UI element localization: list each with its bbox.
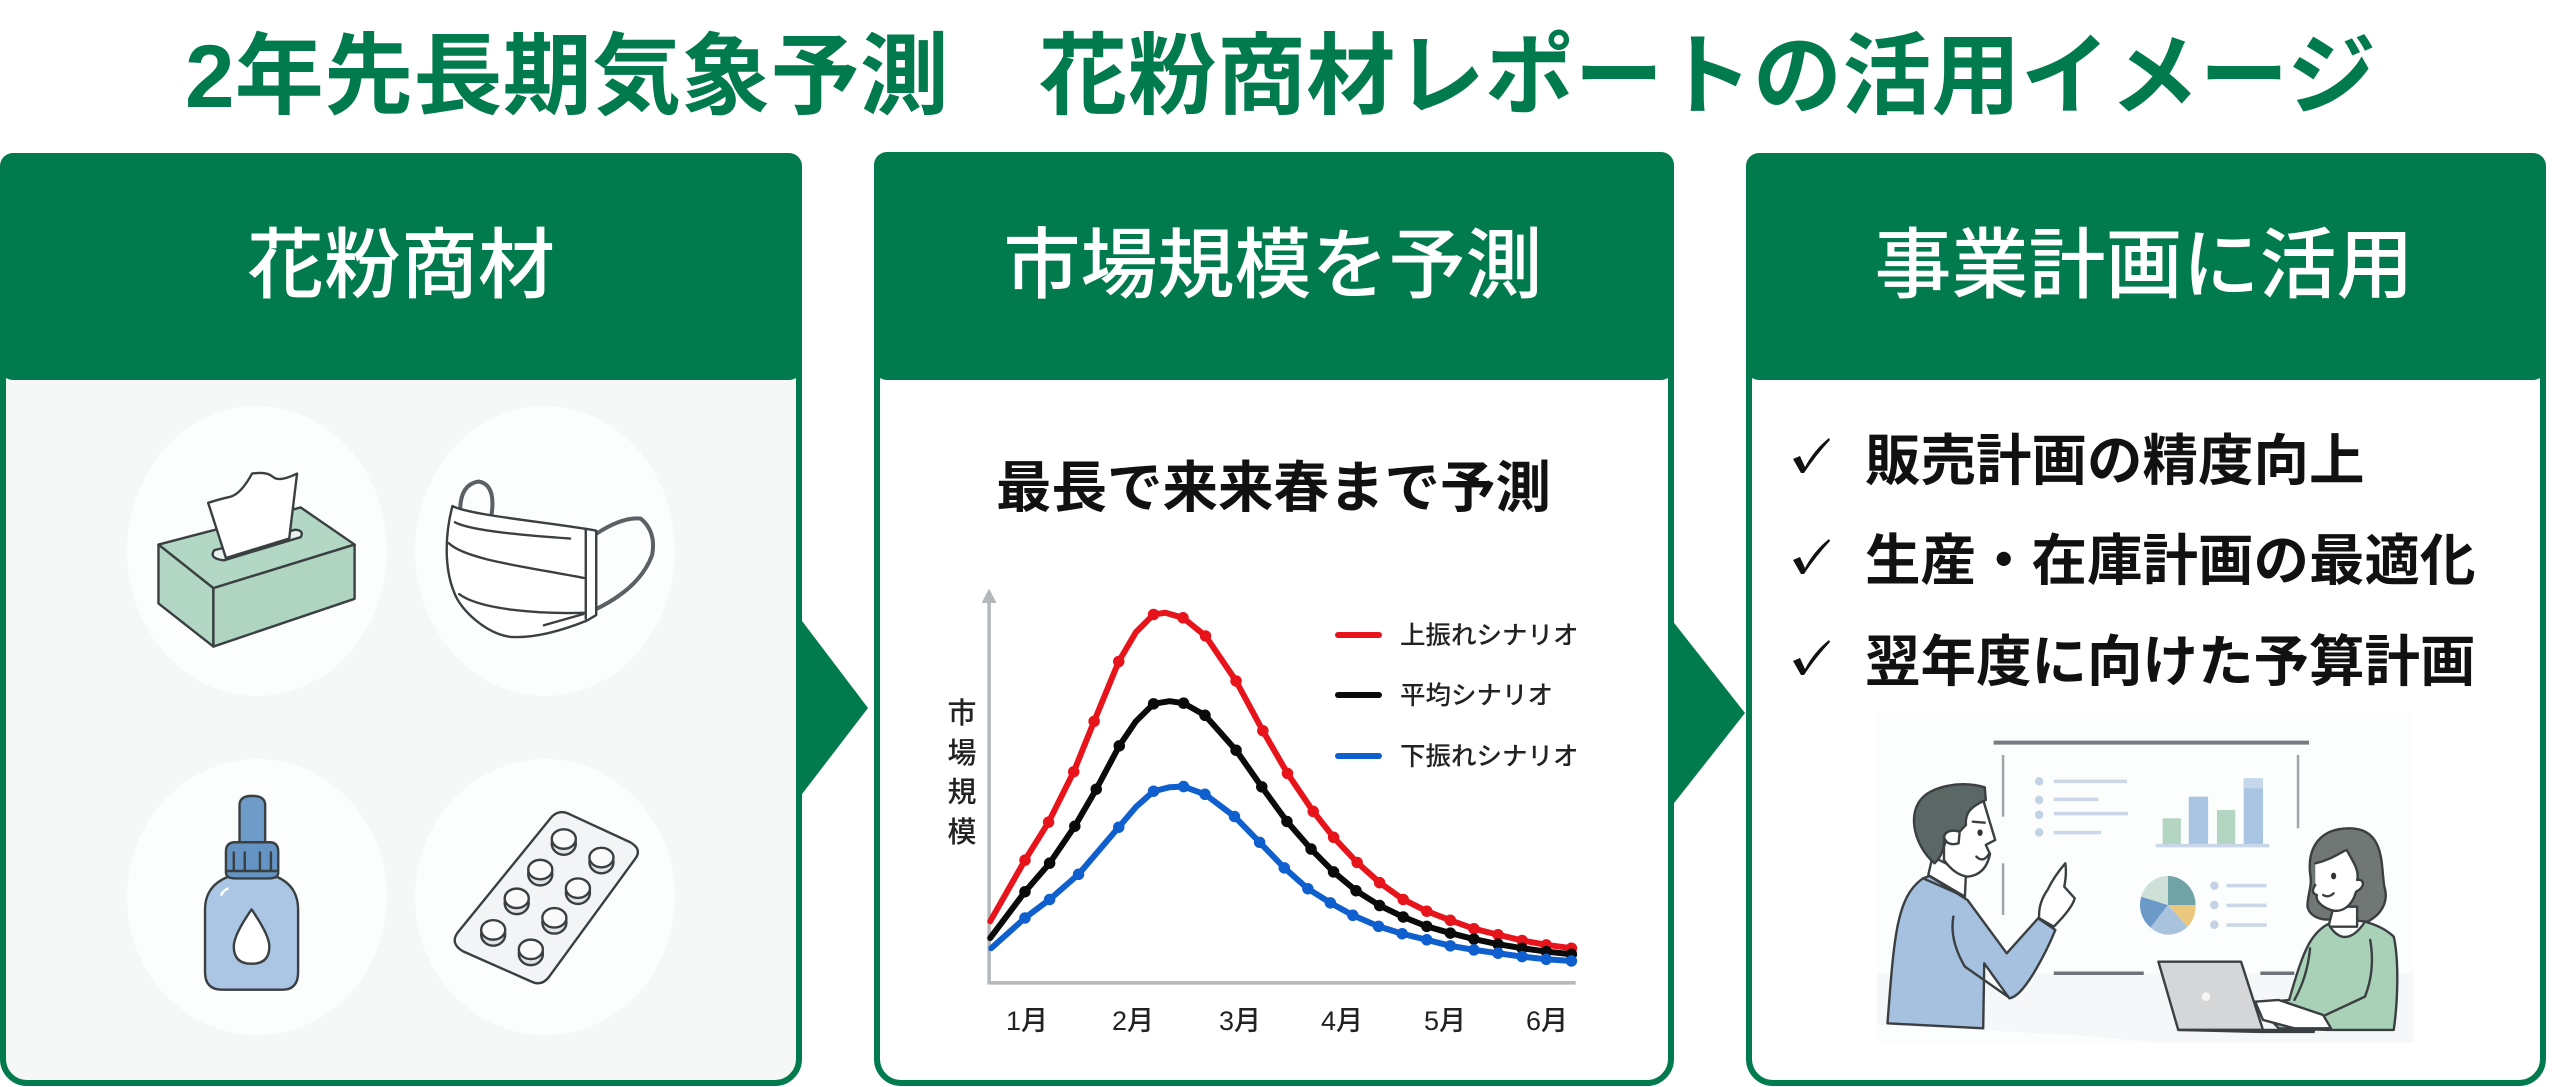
line chart: market size scenarios xyxy=(947,589,1579,1036)
x axis month labels xyxy=(1006,1006,1568,1036)
checklist xyxy=(1793,430,2476,693)
panel header: use in business planning xyxy=(1746,153,2546,380)
panel header: pollen products xyxy=(0,153,802,380)
x axis month labels: 4月 xyxy=(1321,1006,1363,1036)
list item 1: 販売計画の精度向上 xyxy=(1865,430,2365,492)
x axis month labels: 2月 xyxy=(1112,1006,1154,1036)
arrow: forecast to planning xyxy=(1671,619,1745,807)
y axis label: 市 xyxy=(947,697,977,730)
legend: 下振れシナリオ xyxy=(1400,743,1579,771)
x axis month labels: 6月 xyxy=(1526,1006,1568,1036)
x axis month labels: 1月 xyxy=(1006,1006,1048,1036)
icon: check mark 2 xyxy=(1793,539,1830,574)
legend: 上振れシナリオ xyxy=(1400,622,1579,650)
chart heading: 最長で来来春まで予測 xyxy=(996,457,1551,519)
illustration: business presentation xyxy=(1877,713,2414,1043)
y axis label xyxy=(947,697,977,849)
panel header: use in business planning: 事業計画に活用 xyxy=(1874,223,2414,309)
icon: eye drop bottle xyxy=(205,796,298,990)
upside scenario line xyxy=(990,613,1571,948)
list item 2: 生産・在庫計画の最適化 xyxy=(1865,530,2476,592)
icon backdrop circles xyxy=(127,406,675,1035)
arrow: products to forecast xyxy=(799,617,868,798)
y axis label: 場 xyxy=(947,737,977,770)
chart axes xyxy=(982,589,1576,983)
panel: pollen products xyxy=(0,153,802,1083)
screen bullet list xyxy=(2035,777,2128,837)
icon: face mask xyxy=(447,481,653,637)
x axis month labels: 3月 xyxy=(1219,1006,1261,1036)
average scenario line xyxy=(990,701,1571,954)
screen pie chart xyxy=(2140,876,2267,935)
screen bar chart xyxy=(2156,778,2269,846)
icon: check mark 1 xyxy=(1793,438,1830,473)
panel: market size forecast xyxy=(874,152,1674,1083)
legend: 平均シナリオ xyxy=(1400,682,1553,710)
panel body: market size forecast xyxy=(877,155,1671,1083)
list item 3: 翌年度に向けた予算計画 xyxy=(1865,631,2476,693)
presentation screen xyxy=(1994,743,2309,973)
panel body: pollen products xyxy=(3,156,799,1083)
icon: tissue box xyxy=(158,473,355,647)
panel header: market size forecast: 市場規模を予測 xyxy=(1004,223,1542,309)
title: 2年先長期気象予測 花粉商材レポートの活用イメージ xyxy=(185,26,2376,126)
icon: check mark 3 xyxy=(1793,640,1830,675)
icon: blister pack xyxy=(455,812,638,983)
x axis month labels: 5月 xyxy=(1424,1006,1466,1036)
legend xyxy=(1335,622,1579,771)
panel header: pollen products: 花粉商材 xyxy=(247,223,555,309)
panel body: use in business planning xyxy=(1749,156,2543,1083)
downside scenario line xyxy=(991,787,1571,961)
y axis label: 規 xyxy=(947,776,977,809)
laptop xyxy=(2158,962,2314,1032)
panel: use in business planning xyxy=(1746,153,2546,1083)
panel header: market size forecast xyxy=(874,152,1674,380)
illustration background xyxy=(1877,713,2414,1043)
man presenting xyxy=(1887,784,2075,1028)
y axis label: 模 xyxy=(947,816,977,849)
woman at laptop xyxy=(2255,828,2397,1030)
